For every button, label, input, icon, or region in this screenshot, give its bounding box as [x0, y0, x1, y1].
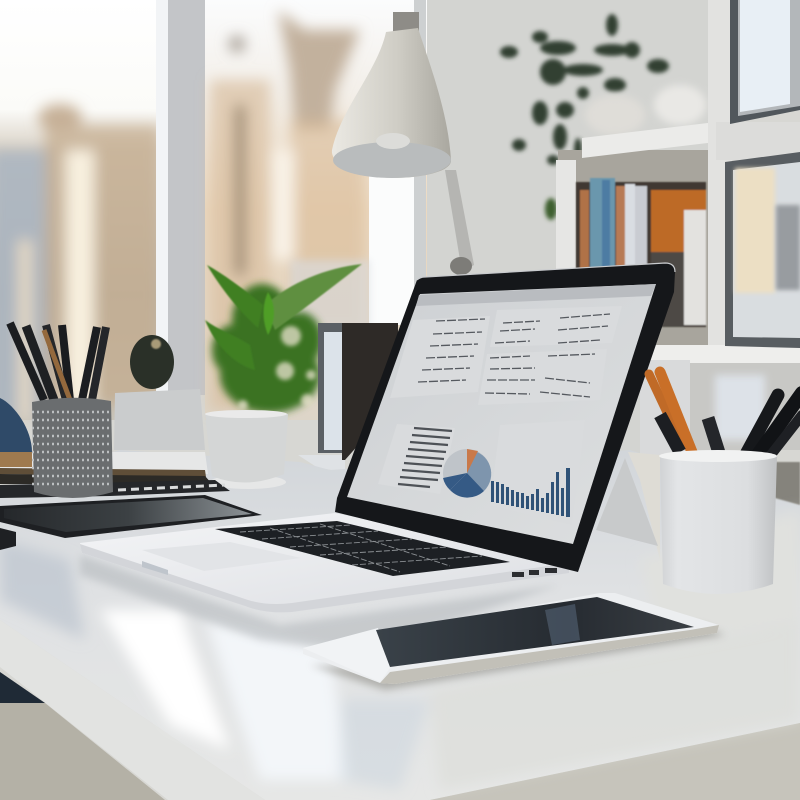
left tablet [0, 495, 262, 550]
right window [205, 0, 427, 420]
screen text lines [418, 314, 610, 397]
person's sleeve [0, 398, 32, 452]
laptop base [80, 513, 570, 612]
white pen holder [659, 450, 777, 594]
trackpad [142, 542, 301, 571]
white cup [205, 410, 288, 489]
screen panels [378, 306, 622, 525]
picture frame: top [730, 0, 800, 124]
pens [649, 372, 800, 456]
hanging plant [500, 14, 669, 220]
green potted plant [205, 264, 362, 413]
monitor behind laptop [298, 323, 398, 472]
window frame [156, 0, 206, 395]
shelving unit [556, 0, 800, 455]
laptop lid [335, 263, 675, 572]
left window [0, 0, 160, 420]
screen dense text column [398, 428, 452, 487]
desk surface [0, 450, 800, 800]
desk lamp [332, 12, 474, 275]
stand behind laptop [596, 458, 658, 546]
phone on desk [303, 593, 719, 684]
chair and floor [0, 672, 165, 800]
mesh pencil cup with pencils [10, 323, 113, 498]
books on shelf [576, 178, 706, 327]
pie chart [443, 449, 491, 498]
picture frame: lower [725, 152, 800, 348]
laptop [80, 263, 675, 612]
cactus in white pot [114, 335, 205, 450]
keyboard [215, 521, 510, 576]
screen [347, 284, 656, 544]
bar chart [491, 468, 570, 517]
books and notebooks [0, 452, 230, 498]
